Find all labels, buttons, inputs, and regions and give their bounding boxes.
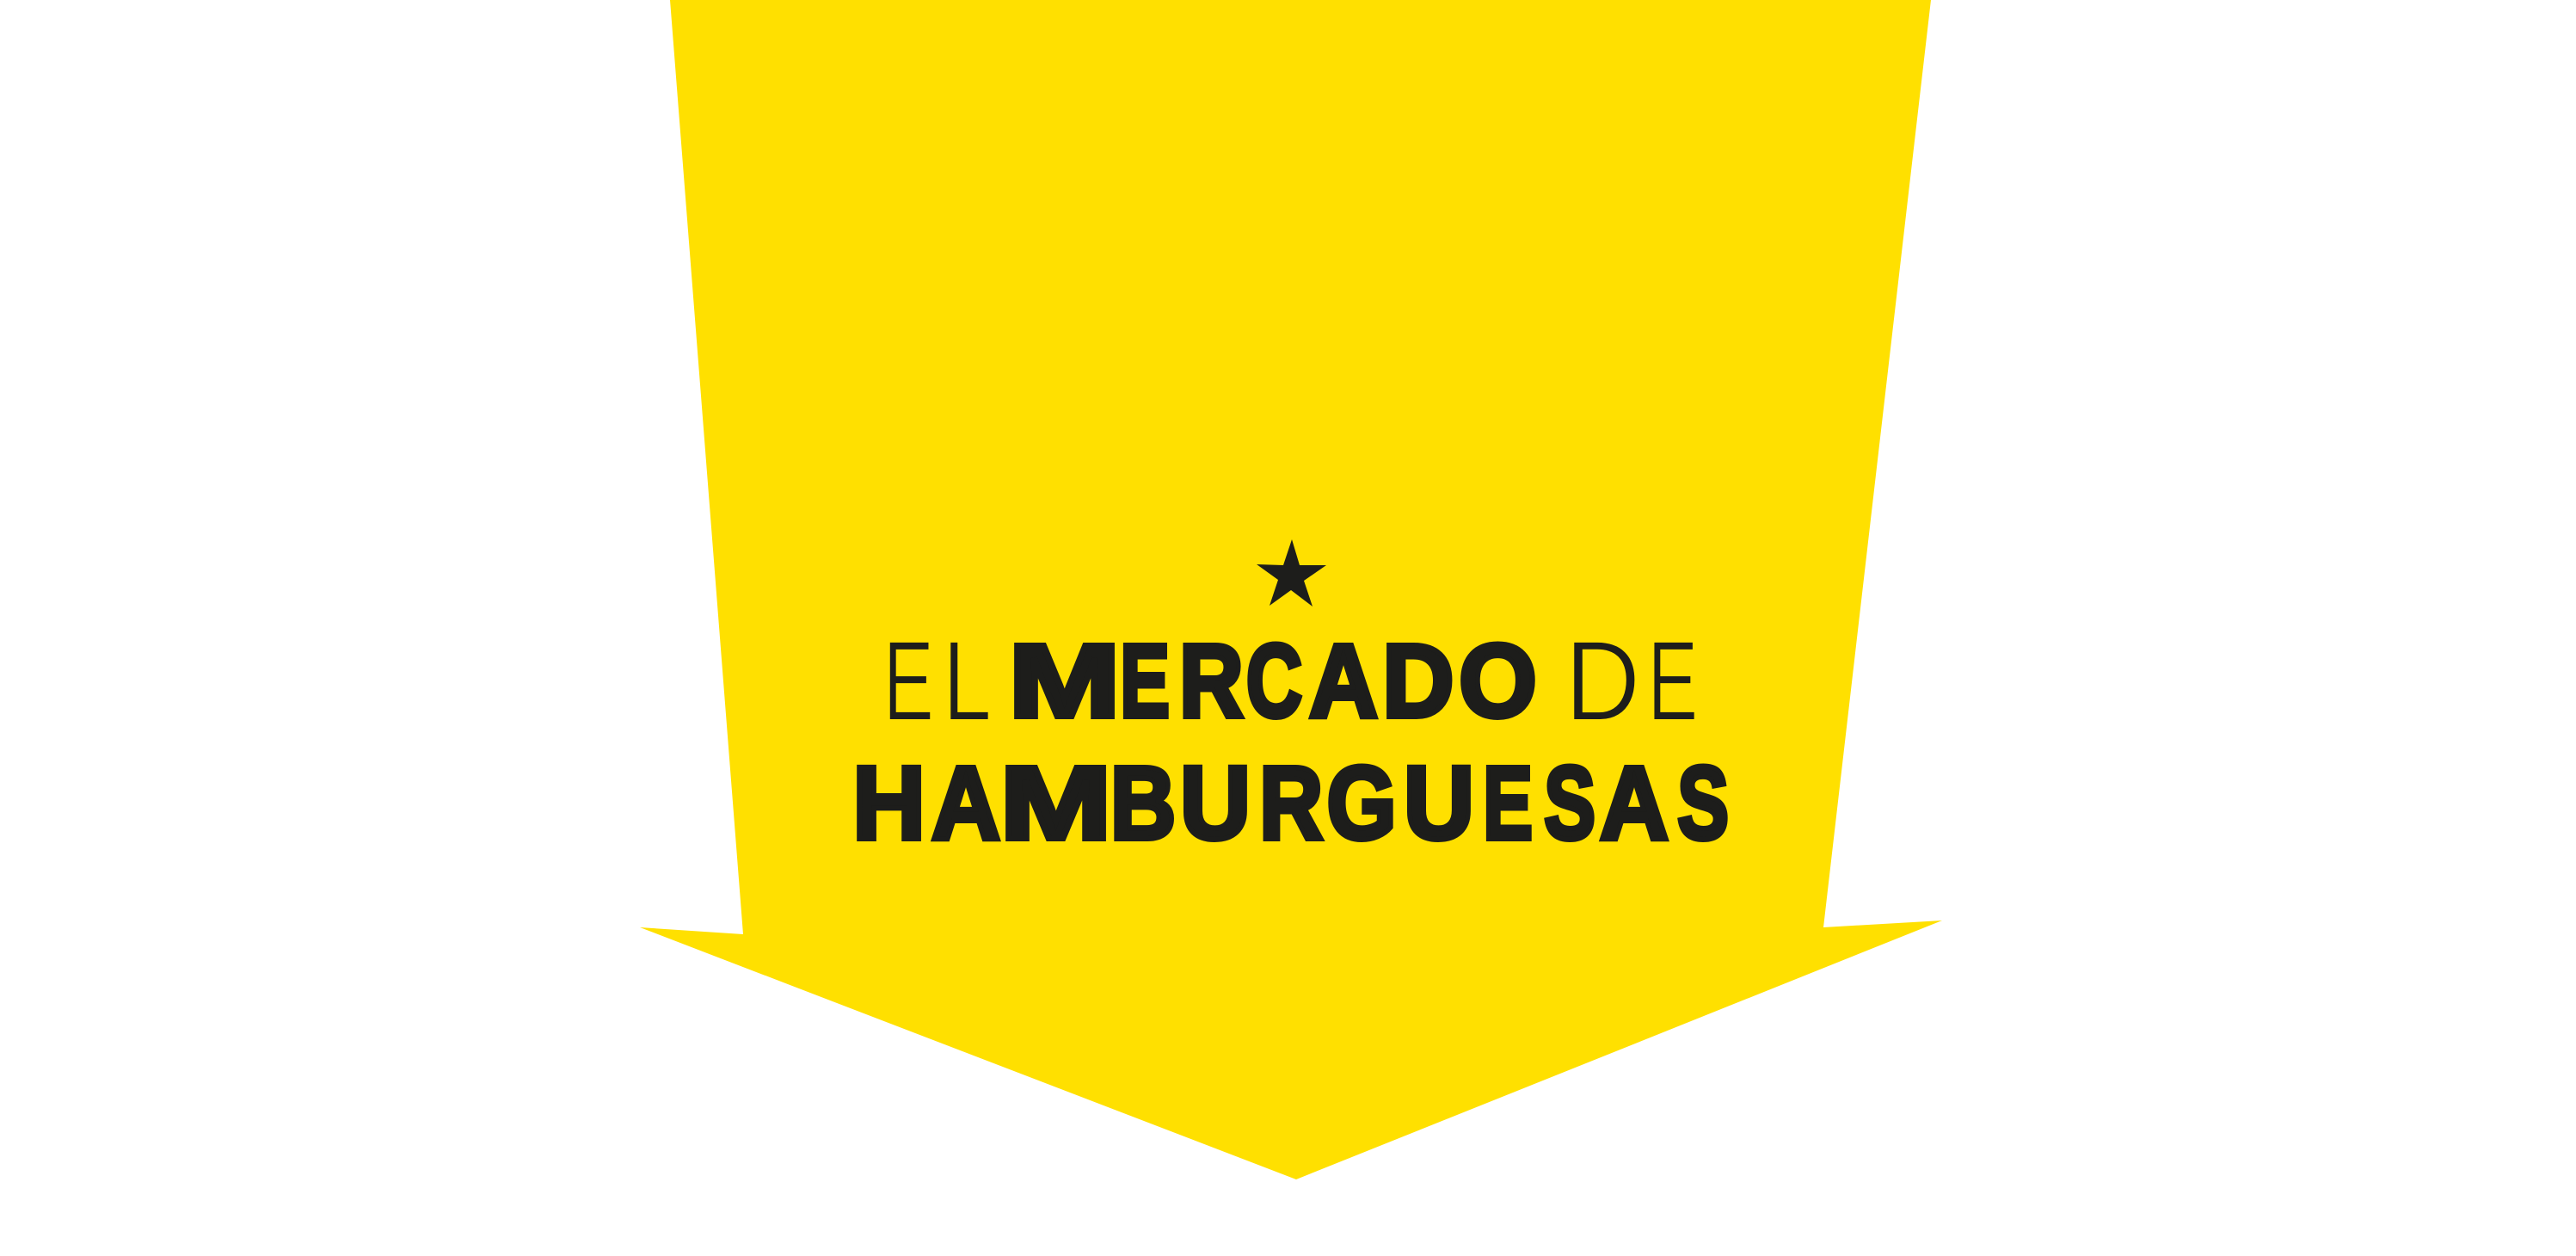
icon: star	[1257, 539, 1326, 606]
title line 1: el mercado de: L	[943, 618, 992, 745]
title: U	[1180, 745, 1251, 861]
title line 1: el mercado de	[883, 618, 1698, 745]
title line 1: el mercado de: C	[1246, 623, 1302, 739]
title	[852, 618, 1729, 861]
panel: yellow pennant banner	[640, 0, 1942, 1179]
title line 1: el mercado de: E	[1648, 618, 1698, 745]
title: E	[1483, 745, 1533, 861]
title: A	[1600, 745, 1669, 861]
title line 1: el mercado de: D	[1382, 623, 1454, 739]
title: U	[1404, 745, 1474, 861]
title: S	[1677, 745, 1729, 861]
title: R	[1259, 745, 1323, 861]
title: M	[1000, 745, 1111, 861]
title line 1: el mercado de: M	[1009, 623, 1120, 739]
title line 1: el mercado de: A	[1309, 623, 1378, 739]
title: H	[852, 745, 925, 861]
title: G	[1327, 745, 1397, 861]
title: S	[1544, 745, 1595, 861]
title line 1: el mercado de: R	[1179, 623, 1244, 739]
title: B	[1110, 745, 1176, 861]
title line 1: el mercado de: E	[883, 618, 934, 745]
title: A	[931, 745, 1000, 861]
title line 1: el mercado de: D	[1565, 618, 1640, 745]
title line 1: el mercado de: O	[1459, 623, 1537, 739]
title line 1: el mercado de: E	[1120, 623, 1170, 739]
